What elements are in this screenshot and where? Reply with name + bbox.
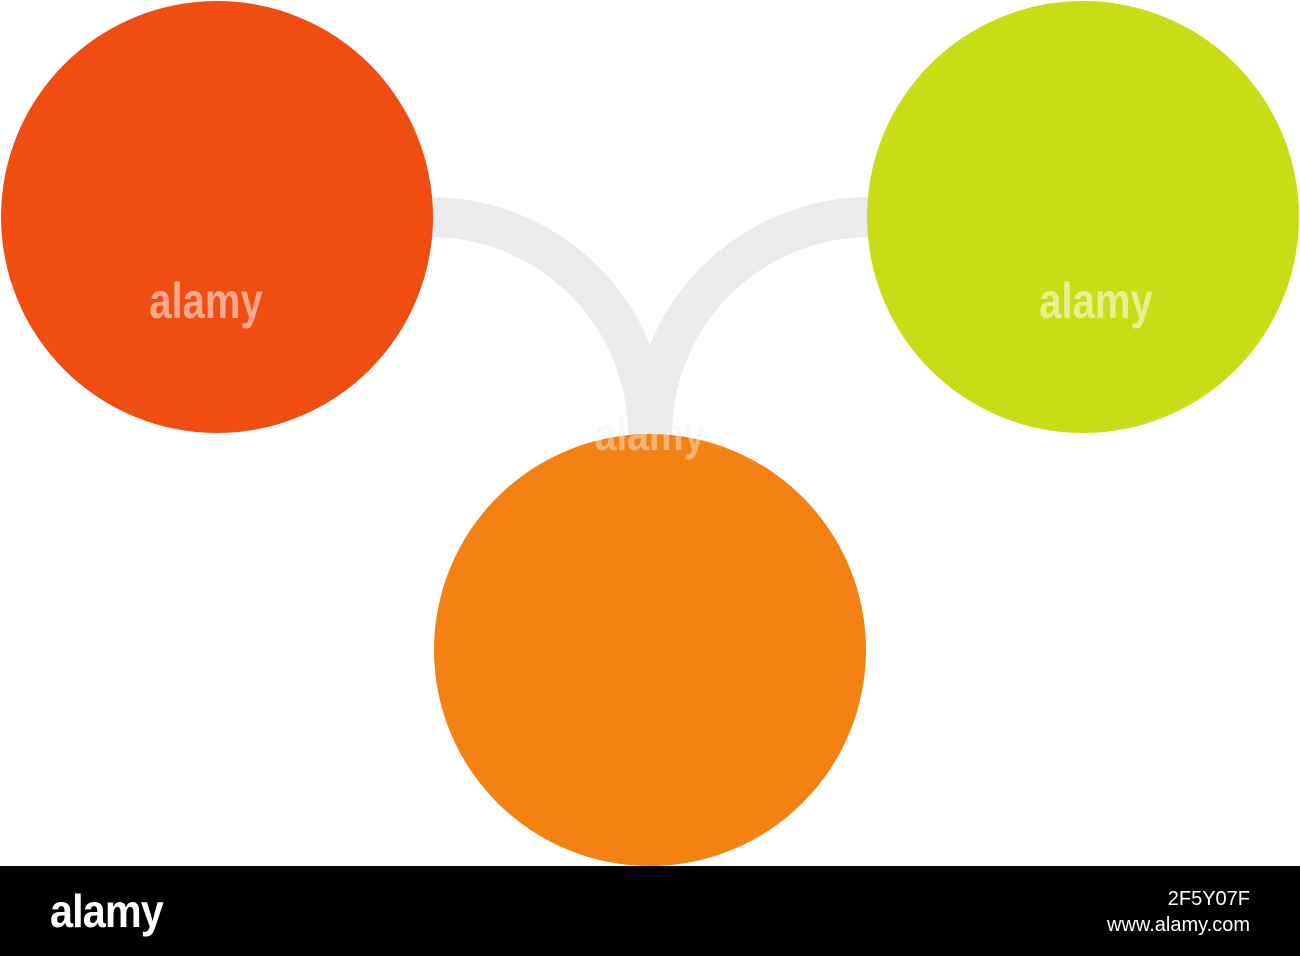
circle: orange <box>434 434 866 866</box>
circle: green: alamy <box>1039 273 1153 329</box>
circle: green <box>867 1 1299 433</box>
footer bar <box>0 866 1300 956</box>
footer id text <box>1107 888 1250 936</box>
circle: red <box>1 1 433 433</box>
connector arcs <box>430 217 870 435</box>
footer id text: 2F5Y07F <box>1168 888 1250 910</box>
footer logo: alamy <box>50 885 163 937</box>
footer id text: www.alamy.com <box>1107 914 1250 936</box>
watermark: alamy <box>595 409 706 461</box>
circle: red: alamy <box>149 273 263 329</box>
